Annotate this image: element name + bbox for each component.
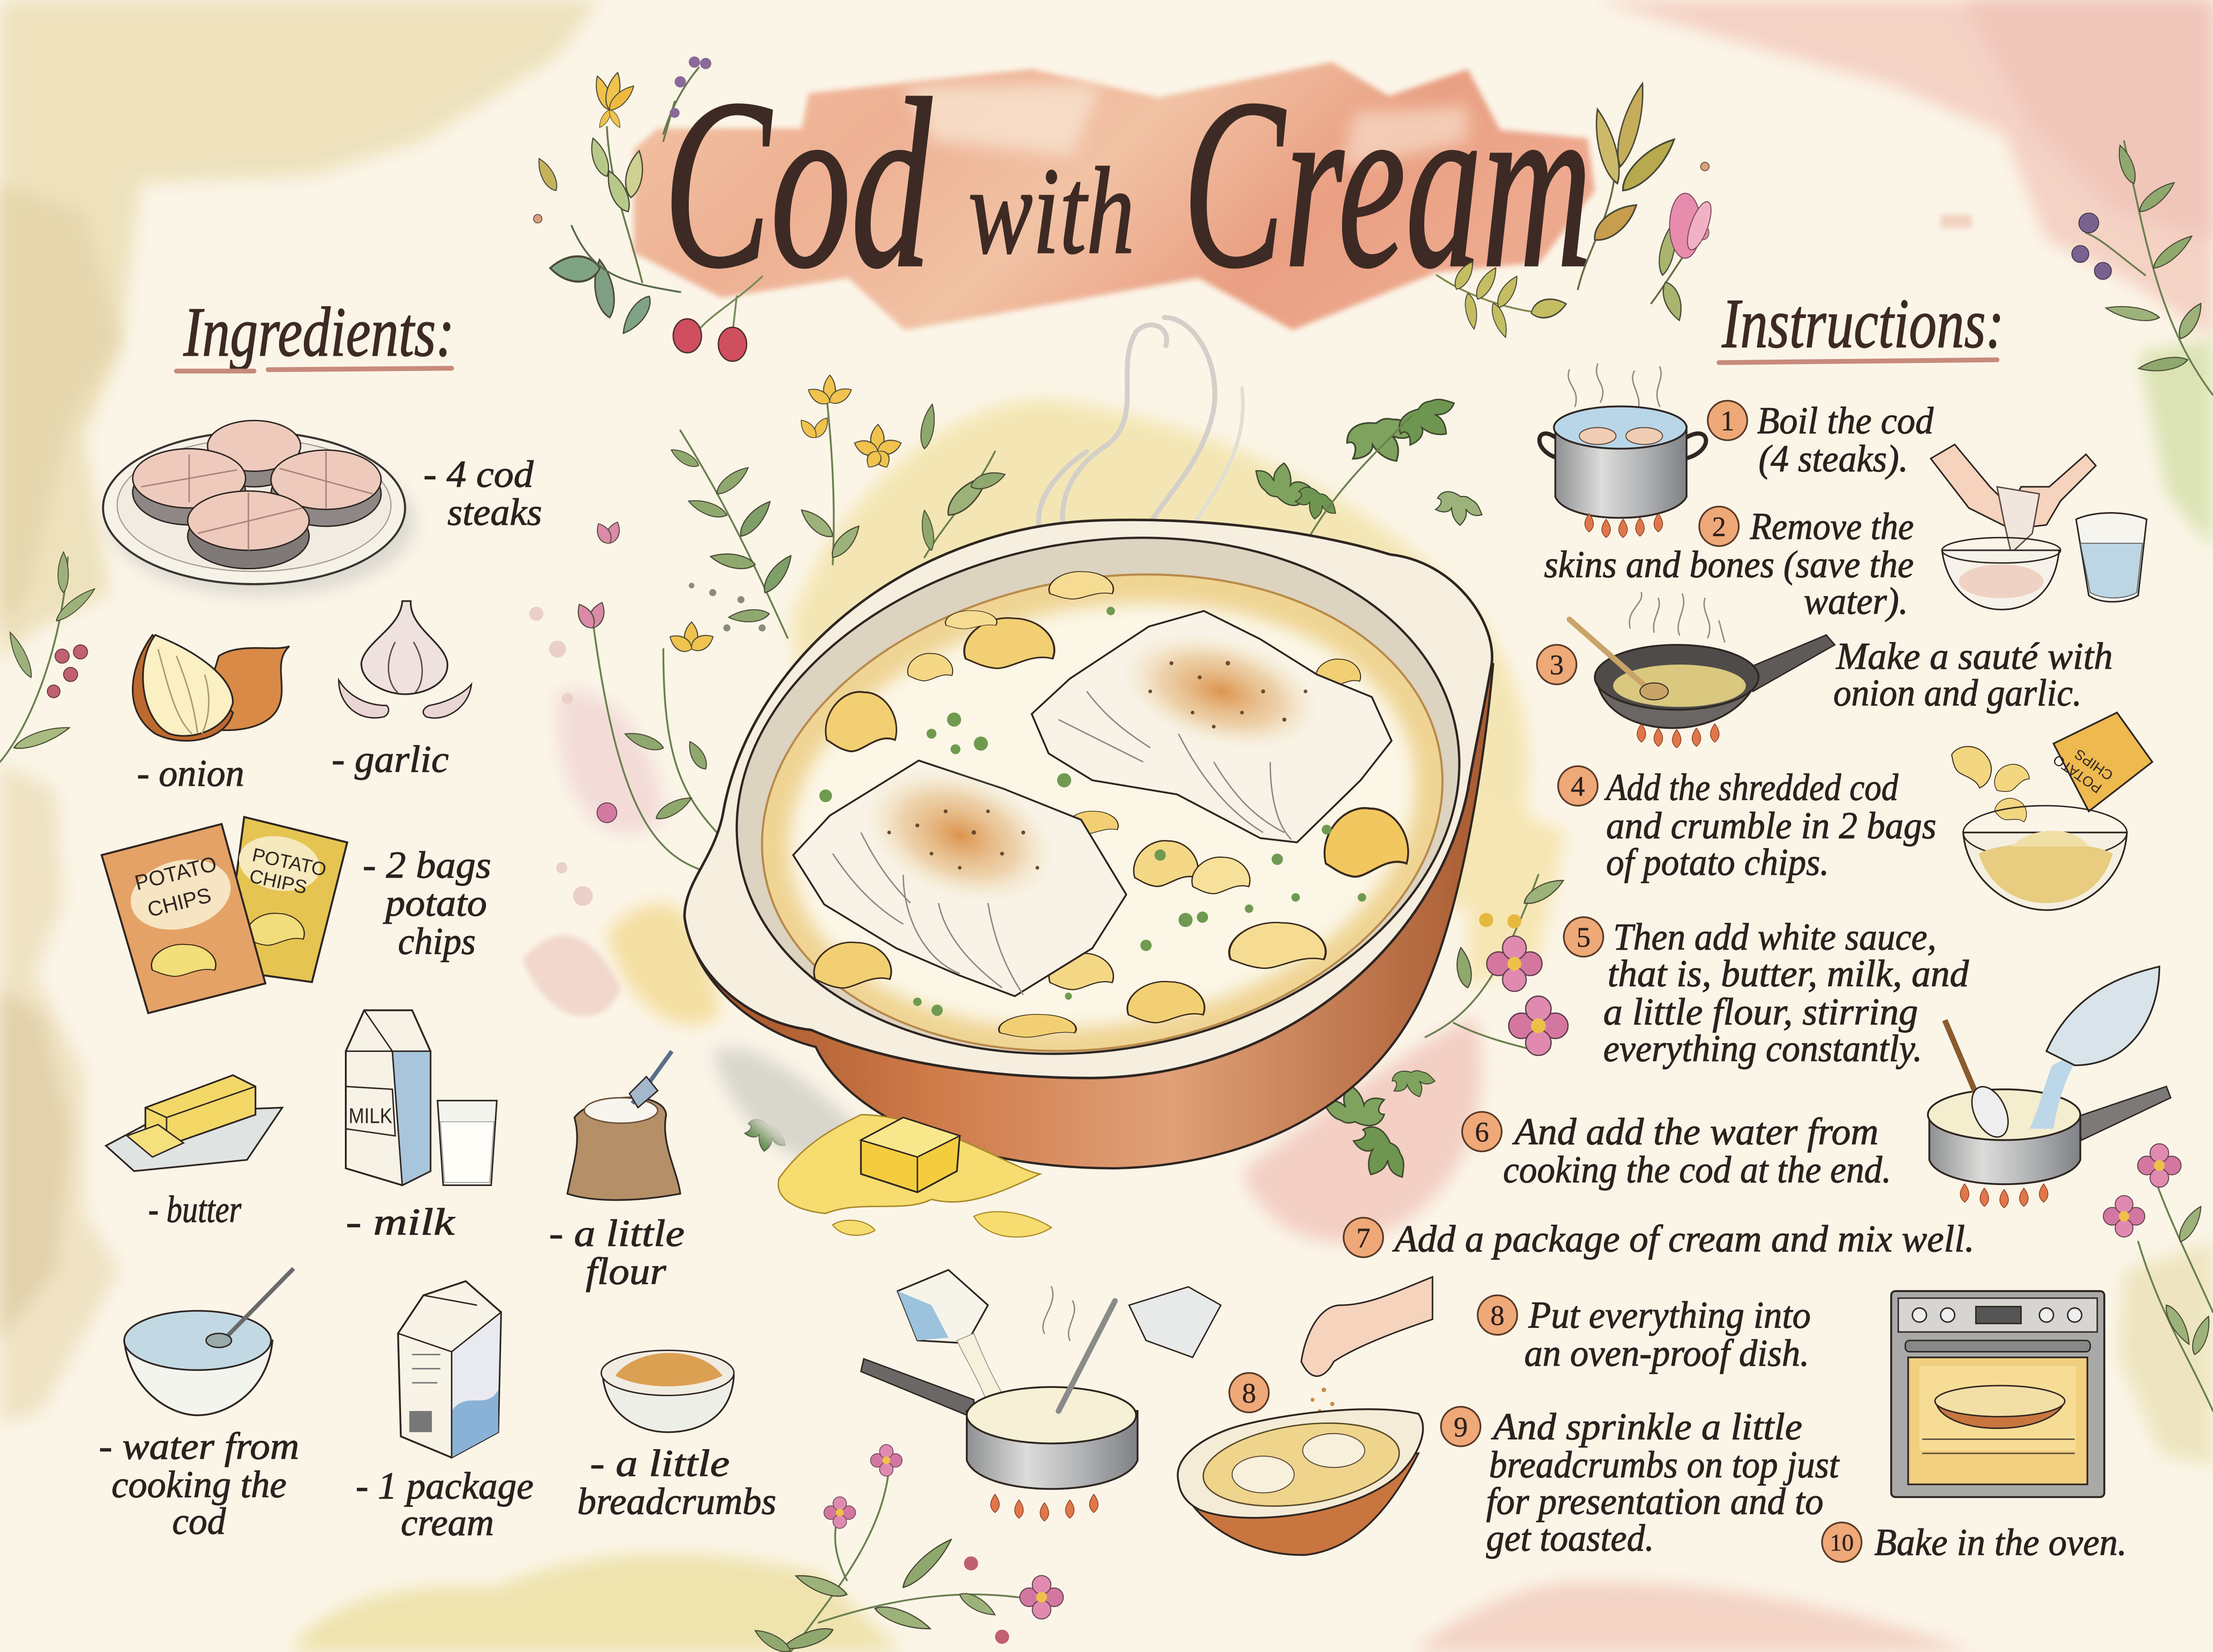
dish shadow <box>713 1048 903 1176</box>
ingredient: breadcrumbs bowl <box>601 1351 734 1432</box>
step 2 text <box>1544 505 1914 622</box>
ingredient: milk carton and glass <box>346 1010 497 1185</box>
hero dish <box>685 483 1501 1176</box>
label: breadcrumbs: breadcrumbs <box>577 1480 776 1522</box>
label: flour: flour <box>586 1250 667 1292</box>
step 1 text: Boil the cod <box>1757 399 1934 442</box>
step 5 text: everything constantly. <box>1604 1027 1922 1069</box>
label: butter: - butter <box>148 1188 242 1230</box>
step 1 text: (4 steaks). <box>1758 437 1908 479</box>
step 6 text: cooking the cod at the end. <box>1503 1148 1891 1191</box>
step 2 text: skins and bones (save the <box>1544 543 1914 585</box>
step 5: whisk in saucepan with milk poured <box>1928 967 2171 1208</box>
step 4: chips pouring into bowl: POTATO <box>2050 751 2105 796</box>
step 9 text: for presentation and to <box>1486 1480 1823 1522</box>
step 8 text <box>1478 1294 1811 1374</box>
step 1: pot on flames <box>1539 364 1706 537</box>
step 4 text: and crumble in 2 bags <box>1606 804 1936 846</box>
ingredient: potato chips bags: POTATO <box>250 844 328 880</box>
ingredient: milk carton and glass: MILK <box>349 1104 392 1128</box>
step 7 text: Add a package of cream and mix well. <box>1392 1217 1975 1260</box>
ingredient: potato chips bags <box>101 817 347 1013</box>
heading: instructions: Instructions: <box>1722 285 2004 363</box>
sauce base <box>724 523 1481 1103</box>
label: water: - water from <box>99 1425 299 1467</box>
step 2 text: water). <box>1804 580 1908 622</box>
ingredient: potato chips bags: CHIPS <box>248 865 309 898</box>
step 8 marker: 8 <box>1242 1378 1256 1409</box>
label: cream <box>355 1464 533 1544</box>
bottom centre sprig <box>752 1445 1063 1652</box>
label: water <box>99 1425 299 1542</box>
title watercolor splash <box>634 62 1595 330</box>
step 1 text <box>1708 399 1934 479</box>
ingredient: potato chips bags: POTATO <box>132 851 219 895</box>
label: cod steaks <box>423 453 542 533</box>
step 6 text: And add the water from <box>1512 1110 1878 1153</box>
step 4 text: of potato chips. <box>1606 841 1829 883</box>
label: potato chips: potato <box>383 882 487 924</box>
label: potato chips <box>363 844 491 962</box>
title <box>663 49 1592 318</box>
label: water: cooking the <box>112 1463 286 1505</box>
left edge sprig <box>0 552 98 762</box>
step 8 text: an oven-proof dish. <box>1524 1332 1809 1374</box>
ingredient: cream carton <box>398 1281 501 1457</box>
label: breadcrumbs: - a little <box>590 1442 730 1484</box>
ingredient: flour sack with scoop <box>568 1051 680 1200</box>
label: onion: - onion <box>137 752 244 794</box>
label: flour <box>549 1212 685 1292</box>
step 8 marker <box>1229 1373 1269 1412</box>
label: cod steaks: steaks <box>447 491 542 533</box>
step 9: gratin dish <box>1178 1409 1423 1555</box>
step 5 text: a little flour, stirring <box>1604 990 1918 1032</box>
top right sprig <box>2072 141 2213 395</box>
step 2 text: 2 <box>1712 511 1726 543</box>
fish fillet lower left <box>793 743 1126 996</box>
step 3 text: onion and garlic. <box>1833 672 2082 714</box>
label: flour: - a little <box>549 1212 685 1254</box>
step 5 text: 5 <box>1576 922 1591 953</box>
step 4 text <box>1558 766 1936 883</box>
washes behind dish <box>522 399 1567 1243</box>
step 10 text: Bake in the oven. <box>1874 1521 2127 1563</box>
label: garlic: - garlic <box>331 738 449 780</box>
parsley flecks <box>819 607 1366 1016</box>
step 1 text: 1 <box>1721 406 1734 437</box>
step 2: hands, bowl and water glass <box>1931 444 2147 609</box>
step 8 text: Put everything into <box>1528 1294 1811 1336</box>
butter on dish front <box>778 1115 1052 1237</box>
title: Cream <box>1183 49 1592 318</box>
step 2 text: Remove the <box>1750 505 1914 547</box>
step 4 text: 4 <box>1571 771 1585 802</box>
label: potato chips: chips <box>398 920 476 962</box>
title: with <box>968 142 1135 280</box>
cream sauce <box>755 555 1450 1076</box>
herbs and flowers around dish <box>529 375 1568 1191</box>
fish fillet upper right <box>1032 611 1391 843</box>
step 6 text <box>1462 1110 1891 1191</box>
label: water: cod <box>172 1499 226 1542</box>
step 5 text: Then add white sauce, <box>1613 915 1936 958</box>
step 5 text: that is, butter, milk, and <box>1608 952 1969 995</box>
step 8 text: 8 <box>1491 1300 1504 1331</box>
step 9 text: And sprinkle a little <box>1491 1405 1802 1447</box>
step 3 text: 3 <box>1550 649 1564 681</box>
ingredient: plate of cod steaks <box>103 420 415 596</box>
step 4: chips pouring into bowl: CHIPS <box>2072 746 2116 784</box>
label: cod steaks: - 4 cod <box>423 453 534 495</box>
step 9 text: 9 <box>1454 1411 1468 1443</box>
title floral right <box>1437 82 1716 339</box>
step 10: oven <box>1891 1291 2104 1497</box>
title: Cod <box>663 49 934 318</box>
step 9 text <box>1441 1405 1840 1559</box>
dish rim <box>685 520 1492 1078</box>
step 9 text: breadcrumbs on top just <box>1489 1443 1840 1486</box>
step 6 text: 6 <box>1475 1116 1489 1148</box>
ingredient: water bowl with spoon <box>124 1268 294 1415</box>
step 9 text: get toasted. <box>1486 1516 1654 1559</box>
step 4: chips pouring into bowl <box>1947 713 2152 910</box>
steam above dish <box>1039 318 1243 578</box>
step 3: frying pan <box>1569 593 1835 748</box>
ingredient: butter <box>106 1075 282 1171</box>
dish inner wall <box>695 483 1501 1109</box>
step 7: cream poured into saucepan <box>861 1270 1221 1521</box>
dish body <box>687 663 1493 1168</box>
step 8: sprinkling hand <box>1301 1277 1432 1413</box>
ingredient: potato chips bags: CHIPS <box>145 883 213 921</box>
ingredient: onion <box>133 635 290 741</box>
title floral left <box>533 56 762 361</box>
ingredient: garlic <box>339 601 471 718</box>
label: milk: - milk <box>346 1201 455 1243</box>
label: potato chips: - 2 bags <box>363 844 491 886</box>
step 10 text: 10 <box>1830 1530 1854 1556</box>
label: cream: - 1 package <box>355 1464 533 1507</box>
heading: ingredients: Ingredients: <box>183 293 455 371</box>
label: cream: cream <box>401 1501 494 1544</box>
step 7 text: 7 <box>1356 1222 1370 1254</box>
step 5 text <box>1564 915 1969 1069</box>
step 3 text <box>1537 635 2113 714</box>
bottom right sprig <box>2103 1144 2213 1411</box>
potato chips in sauce <box>814 572 1408 1037</box>
label: breadcrumbs <box>577 1442 776 1522</box>
step 3 text: Make a sauté with <box>1836 635 2113 677</box>
step 4 text: Add the shredded cod <box>1604 766 1899 808</box>
